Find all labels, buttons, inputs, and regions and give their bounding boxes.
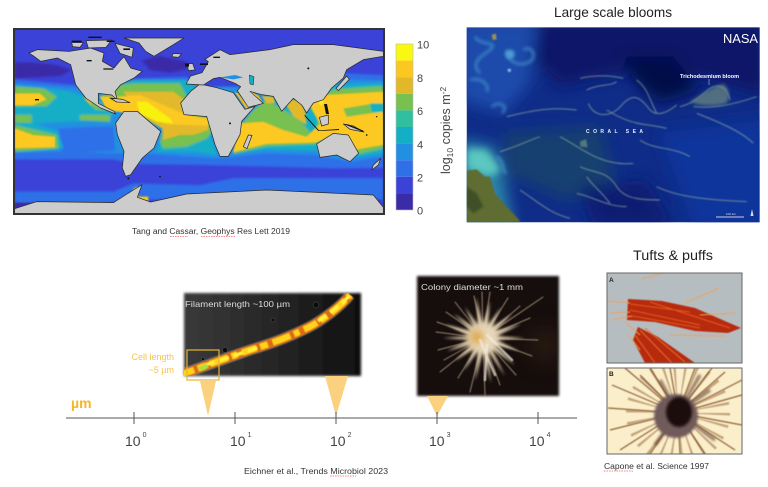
colour bar axis title: 10 [445,148,455,157]
puff core [654,394,698,438]
axis labels: 10 [429,433,445,449]
cell length label [131,352,174,375]
colour bar tick labels: 4 [417,140,423,152]
colour bar tick labels: 0 [417,206,423,218]
caption: tufts citation: Capone et al. Science 1997 [604,462,710,471]
scale pointer: filament [325,376,348,416]
colour bar [396,40,455,218]
heading: tufts and puffs: Tufts & puffs [633,247,713,263]
colour bar tick labels: 2 [417,172,423,184]
heading: large scale blooms: Large scale blooms [554,4,672,20]
photo B: puff [607,368,742,454]
photo label: Coral Sea: CORAL SEA [586,129,643,135]
colour bar axis title: log [439,157,453,174]
tuft lower [633,327,695,363]
colony label: Colony diameter ~1 mm [421,282,523,292]
filament label: Filament length ~100 µm [185,299,290,309]
axis labels: 2 [348,432,352,439]
scale pointer: colony [427,396,448,416]
filament photo [180,293,361,376]
stray filaments [608,273,735,350]
axis labels: 10 [125,433,141,449]
axis labels: 4 [547,432,551,439]
scale bar and compass: 100 km [726,212,736,216]
size axis [66,412,577,449]
colony photo [417,276,561,396]
panel letter A: A [609,277,614,284]
axis labels: 0 [143,432,147,439]
coast land [467,169,519,222]
tuft upper [627,299,741,333]
scale pointer: cell [200,381,216,416]
colour bar tick labels: 10 [417,40,429,52]
axis labels: 1 [248,432,252,439]
bloom filaments [500,76,757,218]
colony puff [436,292,561,395]
world map panel [13,28,385,215]
unit label: µm [71,395,92,411]
scale bar and compass [716,209,754,217]
colour bar axis title: copies m [439,94,453,148]
cell length callout [131,350,219,380]
axis labels: 3 [447,432,451,439]
axis labels: 10 [230,433,246,449]
colour bar tick labels [417,40,429,218]
photo label: NASA: NASA [723,31,758,46]
caption: map citation: Tang and Cassar, Geophys Res Lett 2019 [132,227,291,236]
colour bar tick labels: 6 [417,106,423,118]
cell length label: Cell length [131,352,174,362]
axis labels: 10 [529,433,545,449]
panel letter B: B [609,371,614,378]
inland seas and red sea [220,75,263,109]
photo label: Trichodesmium bloom [680,74,740,85]
satellite photo: Coral Sea bloom [460,20,767,227]
vesicle dots [202,302,319,360]
colour bar axis title: -2 [438,87,448,94]
cell length label: ~5 µm [149,365,174,375]
caption: axis citation: Eichner et al., Trends Microbiol 2023 [244,467,389,476]
photo label: Trichodesmium bloom: Trichodesmium bloom [680,74,740,80]
colour bar tick labels: 8 [417,73,423,85]
photo A: tuft [607,273,742,363]
filament [180,295,350,375]
axis labels: 10 [330,433,346,449]
axis labels [125,432,551,449]
cell highlight box [187,350,219,380]
swirls [470,37,533,173]
island and coast specks [35,37,377,179]
continents [15,38,383,214]
map frame [14,29,384,214]
map ocean abundance field [15,29,383,214]
puff spokes [652,387,704,439]
